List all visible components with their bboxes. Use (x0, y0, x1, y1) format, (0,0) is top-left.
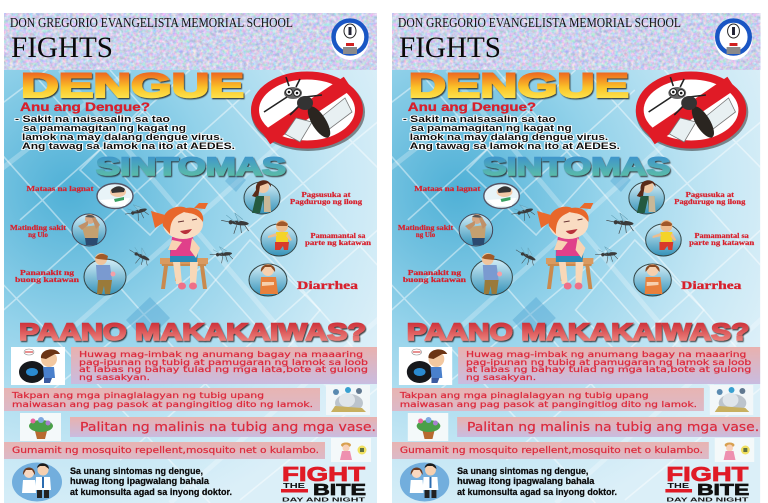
symptom: body pain (403, 253, 512, 295)
symptom: vomiting and nosebleed (629, 180, 746, 214)
tip 4 illustration (331, 438, 371, 462)
heading: how to avoid: PAANO MAKAKAIWAS? (407, 319, 749, 346)
tip 1 illustration (11, 347, 65, 385)
logo: fight the bite: THE (667, 483, 690, 490)
tip 3 illustration (408, 413, 448, 441)
panel: right poster (358, 13, 768, 503)
symptom: body pain: Pananakit ng (408, 269, 462, 277)
text: dengue definition: - Sakit na naisasalin sa tao (15, 114, 171, 124)
symptom: fever (414, 184, 519, 208)
tip 2 (4, 388, 320, 411)
tip 2 illustration (710, 385, 753, 415)
icon: no mosquito sign (636, 73, 748, 151)
tip 1 (71, 347, 377, 384)
symptom: vomiting and nosebleed: Pagdurugo ng ilong (674, 198, 746, 206)
tip 2: maiwasan ang pag pasok at pangingitlog dito ng lamok. (400, 400, 697, 409)
text: consult doctor: at kumonsulta agad sa inyong doktor. (70, 487, 232, 498)
text: dengue definition: Ang tawag sa lamok na ito at AEDES. (410, 141, 620, 151)
symptom: body pain: buong katawan (403, 276, 466, 284)
logo: fight the bite: FIGHT (666, 464, 748, 486)
symptom: body pain (15, 253, 126, 295)
tip 3: Palitan ng malinis na tubig ang mga vase. (80, 420, 376, 434)
logo: fight the bite: THE (283, 483, 306, 490)
tip 2 (392, 388, 704, 411)
symptom: rash: parte ng katawan (305, 239, 371, 247)
heading: what is dengue: Anu ang Dengue? (20, 102, 150, 114)
text: consult doctor (457, 465, 617, 497)
text: consult doctor: huwag itong ipagwalang bahala (70, 476, 210, 487)
symptom: body pain: Pananakit ng (20, 269, 75, 277)
icons: mosquitoes (510, 200, 636, 267)
text: consult doctor: Sa unang sintomas ng dengue, (457, 465, 588, 476)
tip 3 (70, 417, 377, 437)
illustration: girl on stool (151, 203, 208, 290)
heading: how to avoid: PAANO MAKAKAIWAS? (19, 319, 366, 346)
symptom: rash: Pamamantal sa (310, 232, 366, 240)
heading: what is dengue: Anu ang Dengue? (408, 102, 536, 114)
text: consult doctor (70, 466, 232, 498)
symptom: headache: Matinding sakit (10, 224, 67, 232)
icons: mosquitoes (123, 200, 251, 267)
tip 1: at labas ng bahay tulad ng mga lata,bote at gulong (466, 365, 752, 374)
title: DENGUE: DENGUE (409, 67, 629, 105)
tip 1: Huwag mag-imbak ng anumang bagay na maaaring (79, 350, 363, 359)
poster background (358, 60, 768, 503)
poster background (0, 60, 400, 503)
symptom: fever: Mataas na lagnat (26, 185, 94, 193)
text: dengue definition: sa pamamagitan ng kagat ng (23, 123, 186, 133)
tip 4 (392, 442, 709, 459)
symptom: vomiting and nosebleed: Pagsusuka at (302, 191, 351, 199)
tip 2: maiwasan ang pag pasok at pangingitlog dito ng lamok. (12, 400, 313, 409)
tip 4 illustration (715, 438, 754, 462)
tip 1: at labas ng bahay tulad ng mga lata,bote at gulong (79, 365, 368, 374)
symptom: body pain: buong katawan (15, 276, 79, 284)
symptom: diarrhea: Diarrhea (297, 280, 358, 292)
text: dengue definition: sa pamamagitan ng kagat ng (411, 123, 572, 133)
tip 4: Gumamit ng mosquito repellent,mosquito net o kulambo. (400, 445, 703, 455)
text: consult doctor: at kumonsulta agad sa inyong doktor. (457, 486, 617, 497)
icon: doctors (400, 462, 449, 502)
title: DENGUE: DENGUE (21, 67, 244, 105)
tip 2: Takpan ang mga pinaglalagyan ng tubig upang (398, 391, 649, 400)
header band (4, 13, 377, 70)
logo: fight the bite: BITE (697, 482, 749, 499)
text: dengue definition: lamok na may dalang dengue virus. (410, 132, 608, 142)
symptom: vomiting and nosebleed: Pagdurugo ng ilong (290, 198, 363, 206)
logo: fight the bite (665, 464, 749, 503)
logo: fight the bite: FIGHT (282, 464, 365, 486)
icon: doctors (12, 462, 62, 502)
tip 3 illustration (20, 413, 61, 441)
tip 1: Huwag mag-imbak ng anumang bagay na maaaring (466, 350, 747, 359)
text: dengue definition: - Sakit na naisasalin sa tao (403, 114, 557, 124)
symptom: fever: Mataas na lagnat (414, 185, 481, 193)
tip 1 illustration (399, 347, 452, 385)
icon: no mosquito sign (251, 73, 365, 151)
tip 4: Gumamit ng mosquito repellent,mosquito net o kulambo. (12, 446, 319, 456)
tip 4 (4, 442, 325, 459)
logo: fight the bite: BITE (313, 482, 366, 499)
heading: SINTOMAS: SINTOMAS (483, 154, 670, 181)
heading: FIGHTS: FIGHTS (11, 31, 113, 64)
symptom: diarrhea: Diarrhea (681, 280, 742, 292)
text: dengue definition: Ang tawag sa lamok na ito at AEDES. (22, 141, 235, 151)
header band background (392, 13, 760, 70)
symptom: rash (646, 220, 754, 256)
tip 1 (458, 347, 760, 384)
text: dengue definition (403, 114, 620, 151)
text: dengue definition (15, 114, 235, 151)
symptom: headache: ng Ulo (28, 231, 48, 239)
panel: left poster (0, 13, 400, 503)
illustration: girl on stool (537, 203, 593, 290)
heading: SINTOMAS: SINTOMAS (96, 153, 286, 181)
text: consult doctor: Sa unang sintomas ng dengue, (70, 466, 203, 477)
symptom: rash (261, 220, 371, 256)
tip 1: pag-ipunan ng tubig at pamugaran ng lamok sa loob (466, 358, 752, 367)
school name, right poster: DON GREGORIO EVANGELISTA MEMORIAL SCHOOL (398, 15, 681, 30)
symptom: fever (26, 184, 133, 208)
tip 1: pag-ipunan ng tubig at pamugaran ng lamok sa loob (79, 358, 368, 367)
icon: school logo (715, 18, 752, 60)
icon: school logo (331, 18, 369, 60)
tip 2 illustration (326, 385, 370, 415)
text: consult doctor: huwag itong ipagwalang bahala (457, 475, 595, 486)
symptom: diarrhea (634, 264, 742, 296)
symptom: headache: ng Ulo (416, 231, 436, 239)
symptom: diarrhea (249, 264, 358, 296)
symptom: rash: Pamamantal sa (695, 232, 749, 240)
symptom: vomiting and nosebleed (244, 180, 363, 214)
symptom: vomiting and nosebleed: Pagsusuka at (686, 191, 735, 199)
symptom: headache: Matinding sakit (398, 224, 454, 232)
tip 3: Palitan ng malinis na tubig ang mga vase. (467, 420, 759, 434)
tip 2: Takpan ang mga pinaglalagyan ng tubig upang (11, 391, 264, 400)
text: dengue definition: lamok na may dalang dengue virus. (22, 132, 223, 142)
tip 3 (457, 417, 760, 437)
symptom: headache (10, 214, 106, 246)
tip 1: ng sasakyan. (79, 373, 150, 382)
symptom: rash: parte ng katawan (689, 239, 754, 247)
school name: DON GREGORIO EVANGELISTA MEMORIAL SCHOOL (10, 15, 293, 30)
logo: fight the bite (281, 464, 366, 503)
tip 1: ng sasakyan. (466, 373, 536, 382)
heading: FIGHTS, right poster: FIGHTS (399, 31, 501, 64)
symptom: headache (398, 214, 493, 246)
